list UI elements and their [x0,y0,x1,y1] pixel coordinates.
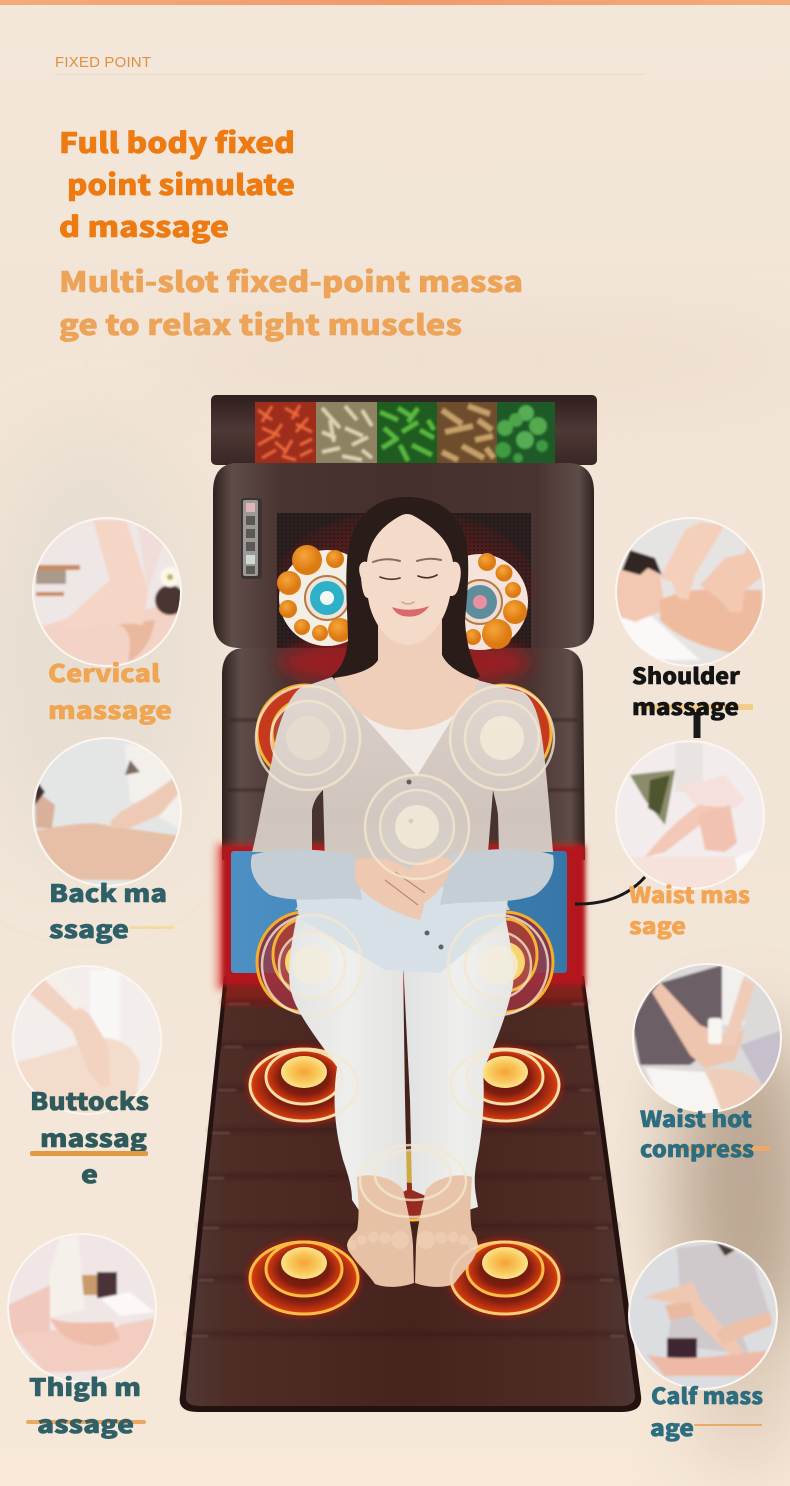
subtitle: Multi-slot fixed-point massa [59,261,523,301]
photo: calf massage [628,1240,778,1390]
mat stitching bands [186,1002,632,1334]
shoulder and lumbar zones [257,685,553,1012]
label: waist massage [629,878,750,941]
cord connector [694,712,700,738]
label: cervical massage: massage [48,691,172,726]
heat zones on mat [248,685,561,1316]
eyebrow label: FIXED POINT [55,54,151,71]
label: waist massage: sage [629,909,686,941]
photo: cervical massage [30,515,185,670]
label: back massage: Back ma [49,874,167,909]
control panel [241,498,262,579]
neck rollers [277,545,528,650]
photo: back massage [30,737,185,892]
label: thigh massage: assage [37,1405,134,1440]
label: calf massage [650,1379,763,1443]
label: buttocks massage [30,1082,149,1190]
sweater [252,677,553,910]
shirt hem [295,885,510,973]
pants [289,915,407,1212]
leg section [180,976,641,1412]
label: thigh massage: Thigh m [29,1368,141,1403]
red glow around lumbar pad [216,844,584,990]
translucent massage rings [250,686,559,1314]
hands [355,857,452,920]
torso section [222,648,585,860]
label: back massage: ssage [49,910,129,945]
inner tee [345,660,470,776]
label: waist hot compress [640,1102,770,1164]
label: cervical massage [48,654,172,726]
subtitle [59,261,523,344]
label: calf massage: Calf mass [651,1379,763,1411]
label: waist hot compress: Waist hot [640,1102,752,1134]
label: calf massage: age [650,1411,694,1443]
herb pillow [211,395,597,465]
photo: waist hot compress [632,963,782,1113]
label: thigh massage [26,1368,146,1440]
photo: buttocks massage [12,965,162,1115]
lumbar pad [231,851,567,973]
feet [347,1175,478,1287]
title: d massage [59,206,229,246]
label: buttocks massage: Buttocks [30,1082,149,1117]
label: cervical massage: Cervical [48,654,160,689]
head section [213,463,594,648]
label: shoulder massage [632,659,753,722]
photo: waist massage [615,740,765,890]
photo: thigh massage [7,1233,157,1383]
centre zone between legs [372,1170,452,1220]
hair [330,497,480,684]
label: shoulder massage: massage [632,690,739,722]
label: shoulder massage: Shoulder [632,659,741,691]
neck and chest [334,620,479,730]
thigh and calf zones [248,1047,561,1316]
facial features [373,559,441,616]
power cord [575,877,645,904]
label: buttocks massage: massag [40,1119,147,1154]
label: waist massage: Waist mas [629,878,750,910]
title: Full body fixed [59,122,295,162]
label: back massage [49,874,174,945]
woman [251,497,554,1287]
label: waist hot compress: compress [640,1132,754,1164]
face [359,514,461,645]
title [59,122,295,246]
photo: shoulder massage [615,517,765,667]
sleeves [251,849,362,900]
buttons [406,780,412,784]
title: point simulate [67,164,295,204]
subtitle: ge to relax tight muscles [59,304,462,344]
label: buttocks massage: e [81,1155,98,1190]
massage mat [180,395,697,1412]
